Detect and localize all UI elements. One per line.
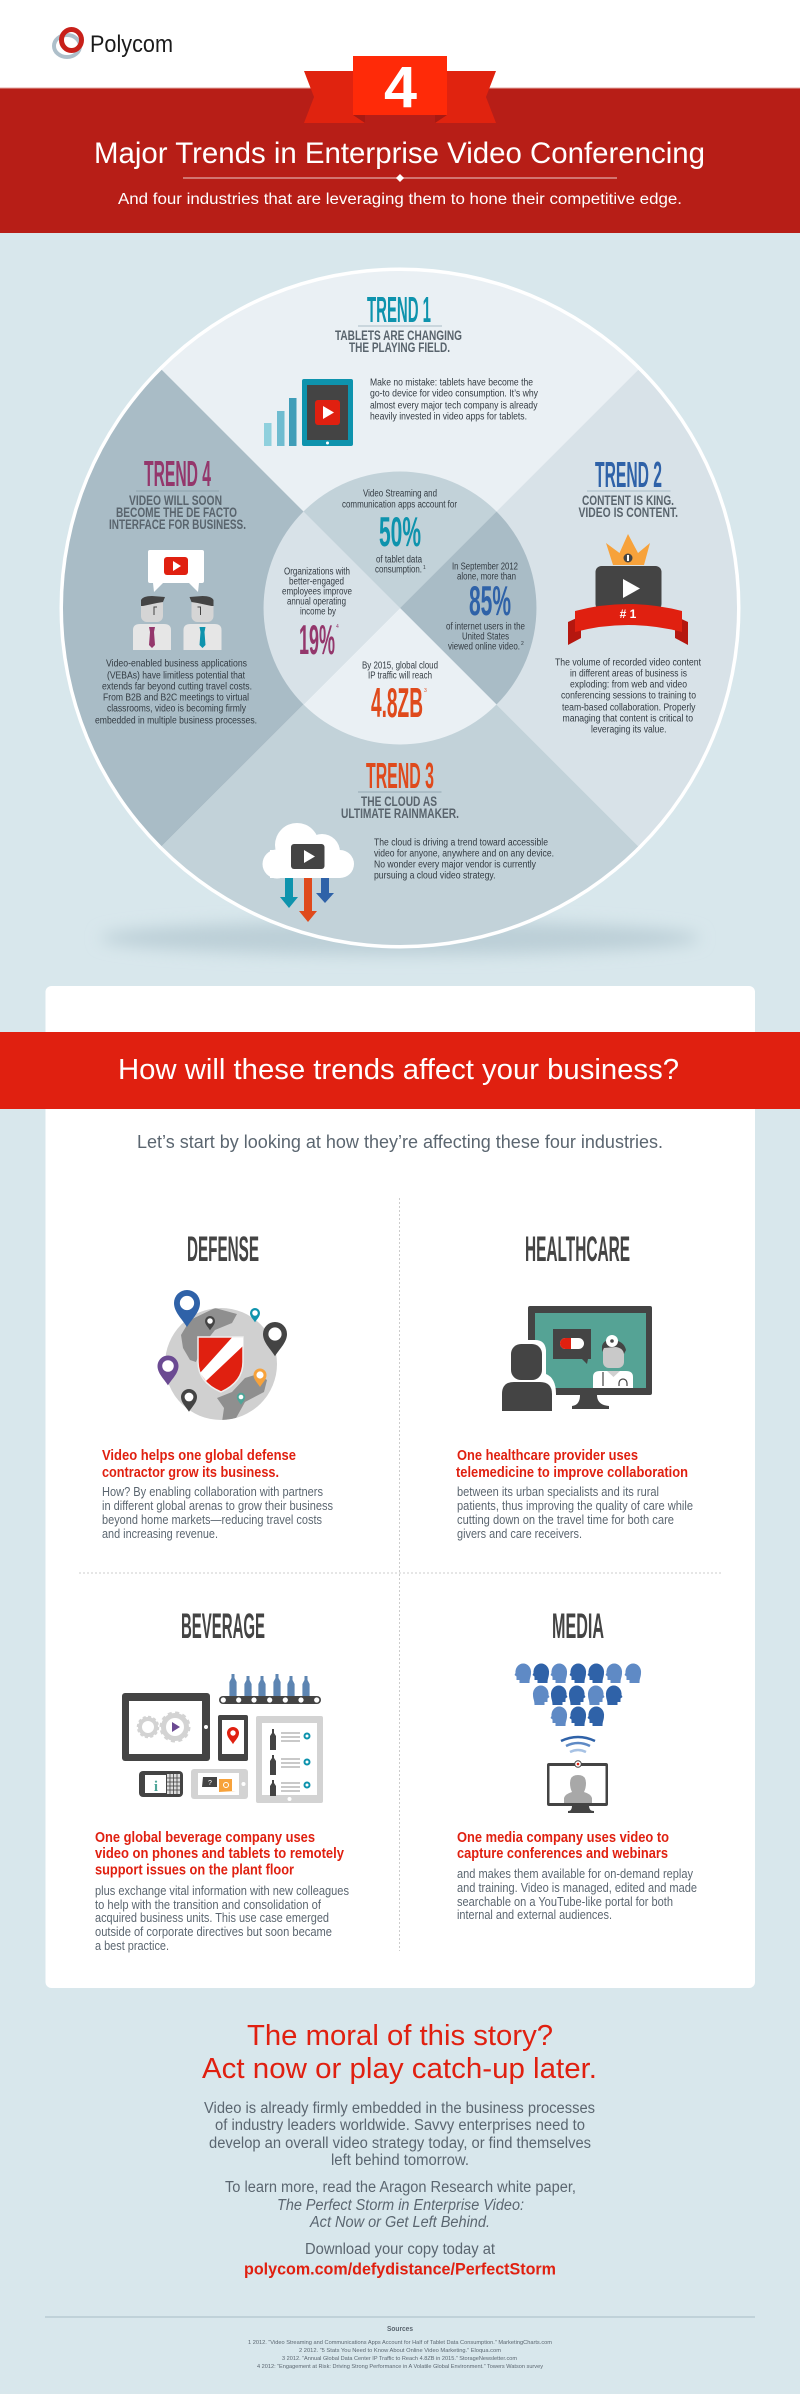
stat: 4.8ZB (362, 660, 438, 726)
panel: beverage: video on phones and tablets to remotely (95, 1846, 344, 1862)
panel: trend 4: extends far beyond cutting travel costs. (102, 682, 252, 692)
stat: 50 percent: consumption. (375, 564, 422, 576)
panel: media: One media company uses video to (457, 1830, 669, 1846)
panel: beverage: acquired business units. This use case emerged (95, 1911, 329, 1925)
sources: Sources (387, 2324, 413, 2333)
conclusion body text: left behind tomorrow. (331, 2152, 469, 2169)
icon: two people sharing video (133, 550, 222, 650)
icon: crowned video player with ribbon: # 1 (620, 607, 637, 621)
panel: trend 4: INTERFACE FOR BUSINESS. (109, 517, 246, 532)
banner: how will these trends affect your business: How will these trends affect your business? (118, 1054, 679, 1086)
panel: trend 3: ULTIMATE RAINMAKER. (341, 806, 459, 821)
panel: beverage (95, 1607, 349, 1953)
panel: trend 2: team-based collaboration. Properly (562, 702, 696, 714)
panel: trend 4: (VEBAs) have limitless potential that (107, 670, 245, 682)
icon: cloud with play button and arrows (262, 823, 354, 922)
stat: 4.8ZB: 4.8ZB (371, 679, 423, 726)
stat: 85 percent: 85% (469, 577, 511, 624)
icon: audience heads, signal and monitor (514, 1664, 641, 1813)
panel: trend 4: TREND 4 (144, 453, 211, 494)
sources (248, 2324, 552, 2370)
panel: healthcare: telemedicine to improve collaboration (456, 1465, 688, 1481)
panel: trend 3 (262, 755, 554, 922)
panel: healthcare: between its urban specialists and its rural (457, 1485, 659, 1499)
stat: 85 percent (446, 562, 525, 652)
stat: 19 percent: Organizations with (284, 566, 350, 578)
sources: 1 2012. “Video Streaming and Communications Apps Account for Half of Tablet Data Consumption.” MarketingCharts.com (248, 2340, 552, 2346)
stat: 19 percent (282, 566, 352, 663)
panel: trend 3: The cloud is driving a trend toward accessible (374, 838, 548, 848)
panel: trend 2: The volume of recorded video content (555, 658, 701, 668)
stat: 19 percent: annual operating (287, 596, 346, 608)
stat: 19 percent: better-engaged (289, 576, 344, 588)
panel: media: MEDIA (552, 1607, 604, 1646)
panel: trend 3: THE CLOUD AS (361, 794, 437, 809)
panel: beverage: to help with the transition and consolidation of (95, 1898, 321, 1912)
panel: trend 4 (95, 453, 257, 726)
icon: tablets, phones and bottling line: i (154, 1779, 158, 1795)
panel: defense: Video helps one global defense (102, 1448, 296, 1464)
panel: healthcare: cutting down on the travel time for both care (457, 1513, 674, 1527)
panel: trend 3: pursuing a cloud video strategy. (374, 870, 496, 882)
panel: trend 4: VIDEO WILL SOON (129, 493, 222, 508)
stat: 50 percent: of tablet data (376, 554, 422, 566)
panel: beverage: BEVERAGE (181, 1607, 265, 1646)
trends wheel (60, 268, 740, 948)
panel: healthcare: patients, thus improving the quality of care while (457, 1499, 693, 1513)
panel: trend 4: embedded in multiple business processes. (95, 716, 257, 726)
conclusion body text: develop an overall video strategy today, or find themselves (209, 2135, 591, 2152)
conclusion heading: The moral of this story? (247, 2020, 553, 2052)
panel: trend 1 (264, 289, 538, 446)
stat: 19 percent: 4 (336, 624, 339, 630)
panel: defense (102, 1230, 333, 1541)
panel: defense: and increasing revenue. (102, 1527, 218, 1541)
panel: trend 1: THE PLAYING FIELD. (349, 340, 450, 355)
stat: 19 percent: 19% (299, 616, 335, 663)
stat: 50 percent: Video Streaming and (363, 488, 437, 500)
stat: 85 percent: viewed online video. (448, 642, 520, 652)
panel: trend 2 (555, 454, 701, 736)
panel: industries card (0, 986, 800, 1988)
panel: trend 4: From B2B and B2C meetings to virtual (103, 692, 249, 704)
panel: defense: beyond home markets—reducing travel costs (102, 1513, 322, 1527)
subtitle: And four industries that are leveraging them to hone their competitive edge. (118, 191, 682, 208)
panel: media: and training. Video is managed, edited and made (457, 1881, 697, 1895)
panel: trend 2: VIDEO IS CONTENT. (578, 505, 678, 520)
panel: trend 2: exploding: from web and video (570, 680, 687, 690)
panel: beverage: One global beverage company uses (95, 1830, 315, 1846)
panel: media: and makes them available for on-demand replay (457, 1867, 694, 1881)
panel: healthcare: One healthcare provider uses (457, 1448, 638, 1464)
icon: tablets, phones and bottling line: ? (208, 1780, 212, 1787)
icon: globe with shield and map pins (158, 1290, 287, 1422)
panel: trend 2: CONTENT IS KING. (582, 493, 674, 508)
panel: trend 1: go-to device for video consumption. It’s why (370, 388, 538, 400)
download call to action: polycom.com/defydistance/PerfectStorm (244, 2260, 556, 2278)
panel: media: capture conferences and webinars (457, 1846, 668, 1862)
icon: telemedicine monitor with doctor and patient (502, 1306, 652, 1411)
stat: 4.8ZB: IP traffic will reach (368, 670, 432, 682)
stat: 85 percent: of internet users in the (446, 622, 525, 632)
panel: trend 4: classrooms, video is becoming firmly (107, 704, 246, 714)
conclusion body text: Video is already firmly embedded in the business processes (204, 2100, 595, 2117)
icon: tablets, phones and bottling line (122, 1674, 323, 1803)
panel: defense: How? By enabling collaboration with partners (102, 1485, 323, 1499)
ribbon with number 4 (304, 55, 496, 123)
stat: 85 percent: 2 (521, 641, 524, 647)
panel: healthcare: HEALTHCARE (525, 1230, 630, 1269)
panel: trend 1: Make no mistake: tablets have become the (370, 378, 533, 388)
banner: how will these trends affect your business (0, 1032, 800, 1109)
panel: trend 3: video for anyone, anywhere and on any device. (374, 848, 554, 860)
logo: Polycom (54, 30, 173, 58)
panel: beverage: support issues on the plant floor (95, 1862, 294, 1878)
sources: 2 2012. “5 Stats You Need to Know About Online Video Marketing.” Eloqua.com (299, 2348, 501, 2354)
stat: 50 percent: 1 (423, 565, 426, 571)
ribbon with number 4: 4 (384, 55, 417, 120)
panel: media (457, 1607, 697, 1922)
panel: defense: DEFENSE (187, 1230, 259, 1269)
panel: beverage: plus exchange vital information with new colleagues (95, 1884, 349, 1898)
panel: trend 2: managing that content is critical to (562, 714, 693, 724)
panel: trend 1: TABLETS ARE CHANGING (335, 328, 462, 343)
conclusion (202, 2020, 597, 2278)
panel: trend 3: No wonder every major vendor is currently (374, 860, 536, 870)
stat: 50 percent: 50% (379, 508, 421, 555)
logo: Polycom: Polycom (90, 31, 173, 58)
white paper reference: The Perfect Storm in Enterprise Video: (277, 2197, 524, 2214)
panel: beverage: outside of corporate directives but soon became (95, 1925, 332, 1939)
panel: trend 2: TREND 2 (595, 454, 662, 495)
panel: trend 4: Video-enabled business applications (106, 658, 247, 670)
download call to action (244, 2241, 556, 2278)
sources: 4 2012: “Engagement at Risk: Driving Strong Performance in A Volatile Global Environment.” Towers Watson survey (257, 2364, 543, 2370)
panel: healthcare (456, 1230, 693, 1541)
stat: 4.8ZB: 3 (424, 688, 427, 694)
icon: tablet with play button and bars (264, 379, 353, 446)
panel: defense: contractor grow its business. (102, 1465, 279, 1481)
panel: trend 4: BECOME THE DE FACTO (116, 505, 237, 520)
panel: trend 2: leveraging its value. (591, 724, 666, 736)
conclusion heading: Act now or play catch-up later. (202, 2053, 597, 2085)
sources: 3 2012. “Annual Global Data Center IP Traffic to Reach 4.8ZB in 2015.” StorageNewsletter.com (282, 2356, 517, 2362)
panel: trend 1: TREND 1 (367, 289, 431, 330)
panel: trend 3: TREND 3 (366, 755, 434, 796)
white paper reference: To learn more, read the Aragon Research white paper, (225, 2179, 576, 2196)
main title: Major Trends in Enterprise Video Conferencing (94, 137, 705, 170)
panel: trend 1: heavily invested in video apps for tablets. (370, 412, 527, 422)
icon: crowned video player with ribbon (568, 534, 688, 645)
panel: trend 1: almost every major tech company is already (370, 400, 538, 412)
intro text: Let’s start by looking at how they’re affecting these four industries. (137, 1132, 663, 1152)
stat: 85 percent: alone, more than (457, 572, 516, 582)
download call to action: Download your copy today at (305, 2241, 496, 2258)
panel: defense: in different global arenas to grow their business (102, 1499, 333, 1513)
panel: healthcare: givers and care receivers. (457, 1527, 582, 1541)
white paper reference: Act Now or Get Left Behind. (309, 2214, 490, 2231)
panel: media: internal and external audiences. (457, 1908, 612, 1922)
conclusion body text: of industry leaders worldwide. Savvy enterprises need to (215, 2117, 585, 2134)
wheel shadow (100, 921, 700, 955)
stat: 85 percent: United States (462, 632, 509, 642)
header: white strip with logo (0, 0, 800, 88)
panel: trend 2: conferencing sessions to training to (561, 690, 696, 702)
panel: beverage: a best practice. (95, 1939, 169, 1953)
white paper reference (225, 2179, 576, 2231)
stat: 50 percent: communication apps account for (342, 500, 458, 510)
stat: 85 percent: In September 2012 (452, 562, 518, 572)
title banner (0, 55, 800, 233)
stat: 4.8ZB: By 2015, global cloud (362, 660, 438, 672)
panel: media: searchable on a YouTube-like portal for both (457, 1895, 673, 1909)
conclusion body text (204, 2100, 595, 2169)
stat: 50 percent (342, 488, 458, 576)
stat: 19 percent: income by (300, 606, 336, 618)
stat: 19 percent: employees improve (282, 586, 352, 598)
conclusion heading (202, 2020, 597, 2085)
panel: trend 2: in different areas of business is (570, 668, 687, 680)
